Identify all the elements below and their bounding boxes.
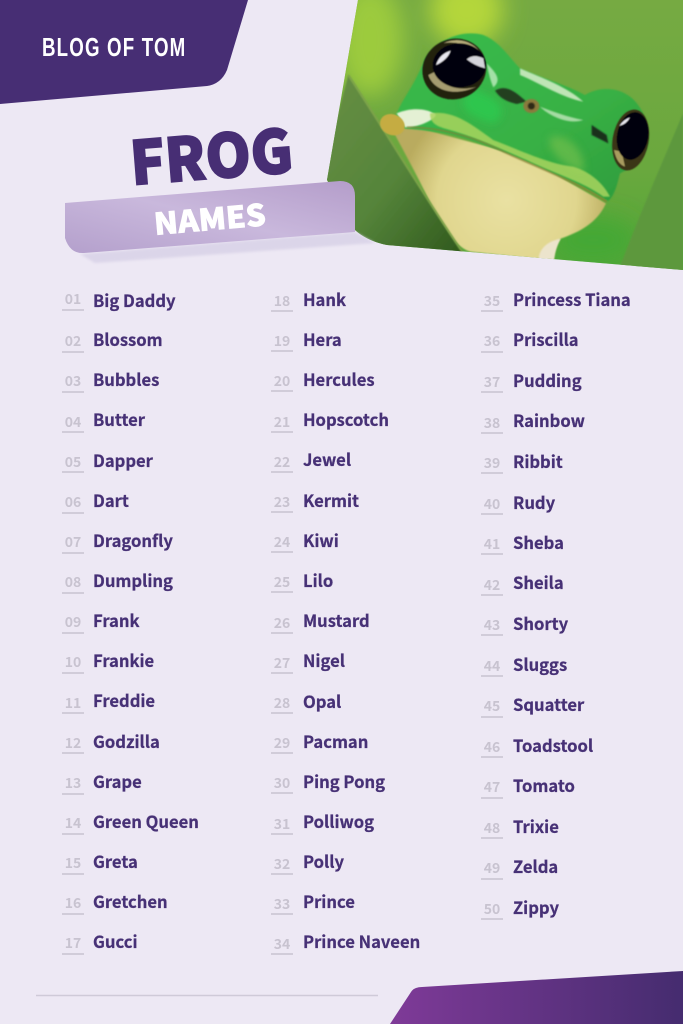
row 17: 17 (65, 933, 81, 953)
row 24: 24 (274, 532, 290, 552)
row 50: 50 (484, 899, 500, 919)
row 36 (481, 327, 579, 352)
row 44: 44 (484, 656, 500, 676)
row 28: Opal (303, 689, 341, 713)
row 50 (481, 895, 559, 919)
row 10: 10 (65, 652, 81, 672)
row 32 (271, 849, 344, 874)
row 47 (481, 773, 575, 798)
frog head (396, 33, 649, 201)
row 07 (62, 528, 173, 553)
row 19 (271, 327, 342, 351)
row 34: 34 (274, 934, 290, 954)
row 11: 11 (65, 693, 81, 713)
row 25 (271, 568, 333, 592)
row 41: 41 (484, 534, 500, 554)
footer accent shape (390, 971, 683, 1024)
row 21: Hopscotch (303, 407, 389, 431)
row 40: Rudy (513, 490, 556, 514)
row 16: Gretchen (93, 889, 168, 913)
row 08: 08 (65, 572, 81, 592)
row 42: Sheila (513, 570, 564, 594)
row 47: 47 (484, 777, 500, 797)
row 15: Greta (93, 849, 138, 873)
row 02: Blossom (93, 327, 163, 351)
row 12 (62, 729, 160, 753)
title banner (65, 181, 355, 253)
row 29: Pacman (303, 729, 368, 753)
row 17: Gucci (93, 929, 138, 953)
row 16: 16 (65, 893, 81, 913)
row 04: Butter (93, 407, 146, 431)
row 06 (62, 488, 129, 513)
frog photo (320, 0, 683, 280)
row 22: 22 (274, 452, 290, 472)
row 26: Mustard (303, 608, 370, 632)
row 15 (62, 849, 138, 874)
row 27: 27 (274, 653, 290, 673)
row 26: 26 (274, 613, 290, 633)
row 44 (481, 652, 567, 676)
row 05: 05 (65, 452, 81, 472)
row 48: 48 (484, 818, 500, 838)
row 12: Godzilla (93, 729, 160, 753)
row 29 (271, 729, 368, 753)
row 30: Ping Pong (303, 769, 385, 793)
row 32: 32 (274, 854, 290, 874)
row 09: Frank (93, 608, 140, 632)
row 37: 37 (484, 372, 500, 392)
row 02 (62, 327, 163, 352)
row 20: Hercules (303, 367, 375, 391)
row 40: 40 (484, 494, 500, 514)
row 05: Dapper (93, 448, 154, 472)
row 28 (271, 689, 341, 713)
row 25: 25 (274, 572, 290, 592)
nose marking (495, 88, 608, 143)
row 38: Rainbow (513, 408, 585, 432)
row 22: Jewel (303, 447, 351, 471)
row 34: Prince Naveen (303, 929, 420, 953)
row 31 (271, 809, 374, 834)
frog throat (392, 128, 606, 259)
row 31: Polliwog (303, 809, 374, 833)
row 41 (481, 530, 564, 554)
row 23: Kermit (303, 488, 359, 512)
name list column 1 (62, 288, 199, 954)
row 23: 23 (274, 492, 290, 512)
row 21: 21 (274, 412, 290, 432)
row 33: 33 (274, 894, 290, 914)
row 19: Hera (303, 327, 342, 351)
background glow (337, 0, 637, 263)
right leaf (620, 113, 683, 272)
row 43: 43 (484, 615, 500, 635)
row 38: 38 (484, 413, 500, 433)
row 09: 09 (65, 612, 81, 632)
row 04 (62, 407, 146, 432)
row 49: Zelda (513, 854, 558, 878)
row 45: 45 (484, 696, 500, 716)
row 24: Kiwi (303, 528, 339, 552)
row 35: 35 (484, 291, 500, 311)
row 23 (271, 488, 359, 512)
row 11: Freddie (93, 688, 155, 712)
row 05 (62, 448, 154, 472)
row 30: 30 (274, 773, 290, 793)
row 14: 14 (65, 813, 81, 833)
row 37 (481, 368, 582, 392)
row 48: Trixie (513, 814, 559, 838)
row 07: 07 (65, 532, 81, 552)
row 09 (62, 608, 140, 633)
title banner shadow (80, 232, 375, 263)
row 45: Squatter (513, 692, 585, 716)
name list column 2 (271, 287, 420, 954)
row 04: 04 (65, 412, 81, 432)
subtitle: names: NAMES (152, 190, 267, 244)
row 06: 06 (65, 492, 81, 512)
row 42: 42 (484, 575, 500, 595)
row 39: Ribbit (513, 449, 563, 473)
row 08 (62, 568, 173, 593)
row 19: 19 (274, 331, 290, 351)
row 28: 28 (274, 693, 290, 713)
row 40 (481, 490, 556, 514)
row 29: 29 (274, 733, 290, 753)
name list column 3 (481, 287, 631, 919)
row 03 (62, 367, 159, 392)
row 01: 01 (65, 289, 81, 309)
row 33 (271, 889, 355, 914)
row 36: 36 (484, 331, 500, 351)
row 31: 31 (274, 814, 290, 834)
row 03: 03 (65, 371, 81, 391)
row 48 (481, 814, 559, 838)
row 12: 12 (65, 733, 81, 753)
row 27 (271, 648, 345, 673)
row 46: 46 (484, 737, 500, 757)
row 49: 49 (484, 858, 500, 878)
row 21 (271, 407, 389, 432)
row 03: Bubbles (93, 367, 159, 391)
row 24 (271, 528, 339, 552)
row 20: 20 (274, 371, 290, 391)
row 47: Tomato (513, 773, 575, 797)
row 37: Pudding (513, 368, 582, 392)
row 44: Sluggs (513, 652, 567, 676)
header panel: blog of tom (0, 0, 248, 104)
row 45 (481, 692, 585, 717)
row 39: 39 (484, 453, 500, 473)
row 39 (481, 449, 563, 473)
row 42 (481, 570, 564, 595)
row 02: 02 (65, 331, 81, 351)
row 43 (481, 611, 569, 635)
row 26 (271, 608, 370, 633)
head shading (463, 90, 584, 173)
row 46: Toadstool (513, 733, 593, 757)
row 17 (62, 929, 138, 954)
row 35: Princess Tiana (513, 287, 631, 311)
row 22 (271, 447, 351, 472)
row 43: Shorty (513, 611, 569, 635)
row 07: Dragonfly (93, 528, 173, 552)
row 18: 18 (274, 291, 290, 311)
row 25: Lilo (303, 568, 333, 592)
row 18: Hank (303, 287, 346, 311)
row 49 (481, 854, 558, 879)
row 38 (481, 408, 585, 433)
row 01: Big Daddy (93, 288, 176, 312)
left leaf (320, 75, 463, 253)
row 13: 13 (65, 773, 81, 793)
row 10: Frankie (93, 648, 154, 672)
row 20 (271, 367, 375, 391)
row 36: Priscilla (513, 327, 579, 351)
row 41: Sheba (513, 530, 564, 554)
row 27: Nigel (303, 648, 345, 672)
row 08: Dumpling (93, 568, 173, 592)
row 06: Dart (93, 488, 129, 512)
row 10 (62, 648, 154, 673)
row 50: Zippy (513, 895, 559, 919)
row 11 (62, 688, 155, 713)
left eye (422, 38, 487, 100)
row 16 (62, 889, 168, 914)
yellow toe pad (380, 114, 406, 136)
right eye (611, 108, 650, 172)
row 32: Polly (303, 849, 344, 873)
row 33: Prince (303, 889, 355, 913)
row 18 (271, 287, 346, 311)
title: frog: FROG (126, 103, 296, 203)
row 15: 15 (65, 853, 81, 873)
row 13: Grape (93, 769, 142, 793)
brand name: BLOG OF TOM (42, 32, 185, 62)
row 14: Green Queen (93, 809, 199, 833)
head highlights (397, 63, 610, 202)
row 13 (62, 769, 142, 794)
